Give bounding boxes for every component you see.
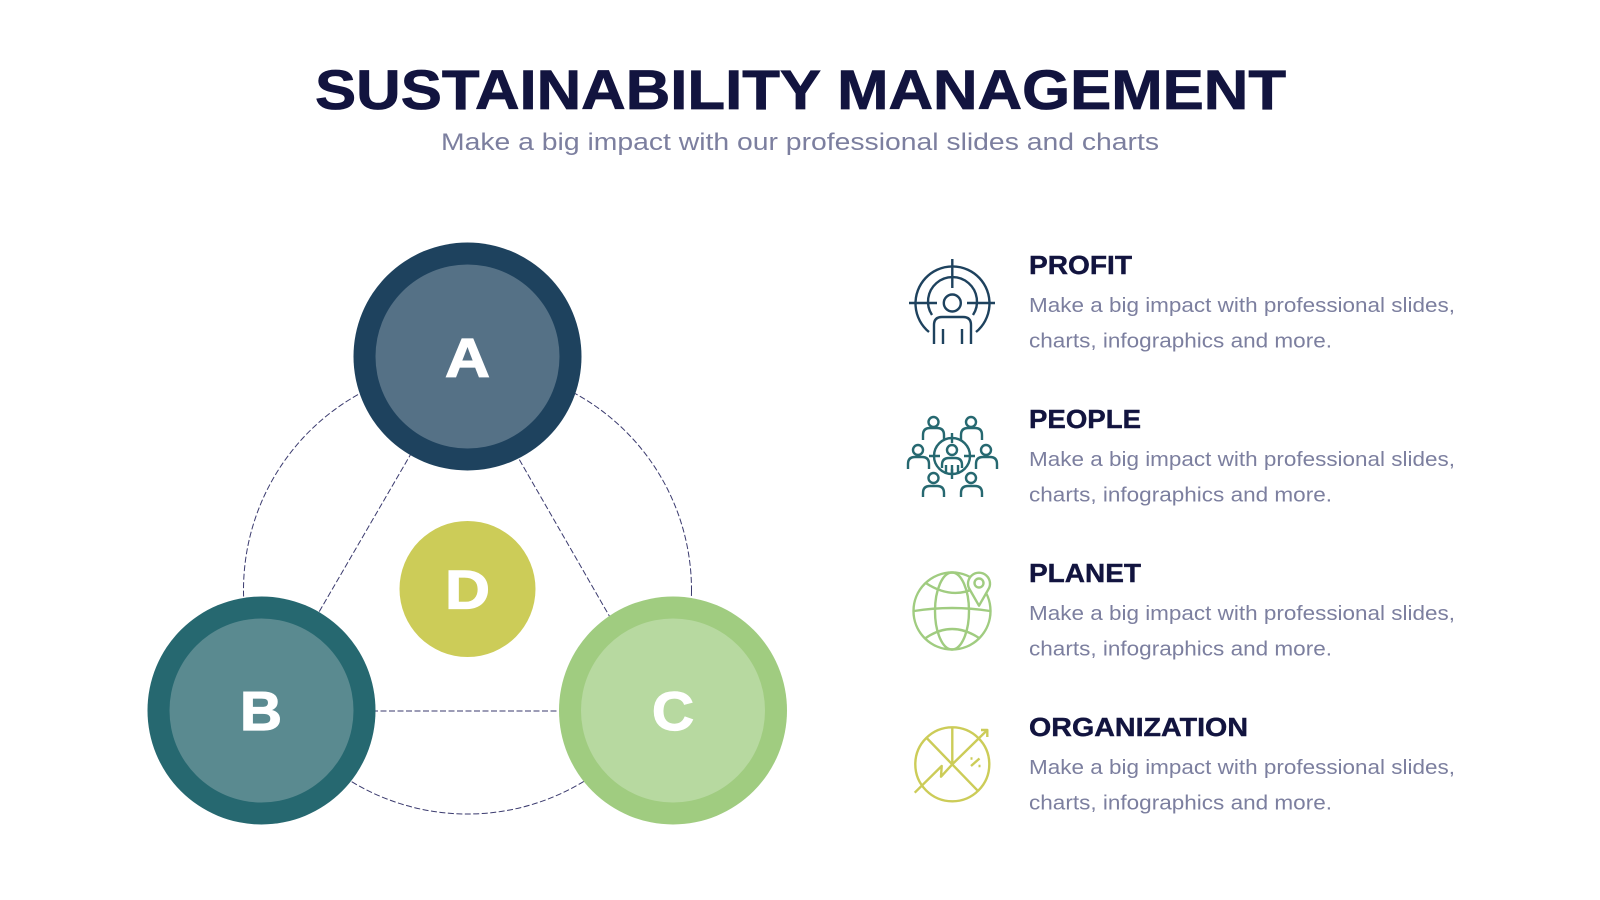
circle C: C [652, 680, 694, 742]
text block: organization [1029, 756, 1455, 814]
panel: profit [909, 252, 1455, 352]
circle A [354, 242, 582, 470]
text block: people: charts, infographics and more. [1029, 484, 1332, 506]
dashed connector ring [244, 366, 692, 814]
diagram: connected circles [148, 242, 787, 824]
heading: planet: PLANET [1029, 560, 1141, 588]
circle D [400, 521, 536, 657]
text block: planet: Make a big impact with professional slides, [1029, 602, 1455, 625]
icon: people target [908, 417, 997, 497]
text block: profit: Make a big impact with professional slides, [1029, 294, 1455, 317]
icon: chart with arrow [915, 727, 989, 801]
text block: planet: charts, infographics and more. [1029, 638, 1332, 660]
circle B [148, 596, 376, 824]
subtitle: Make a big impact with our professional slides and charts [441, 129, 1159, 156]
circle B: B [240, 680, 282, 742]
panel: planet [914, 560, 1455, 660]
icon: target person [909, 259, 995, 344]
text block: planet [1029, 602, 1455, 660]
text block: organization: charts, infographics and more. [1029, 792, 1332, 814]
circle A: A [445, 326, 490, 388]
circle C [559, 596, 787, 824]
text block: profit [1029, 294, 1455, 352]
panel: people [908, 406, 1455, 506]
dashed triangle connectors [262, 356, 673, 711]
text block: people [1029, 448, 1455, 506]
icon: globe with pin [914, 572, 990, 650]
text block: profit: charts, infographics and more. [1029, 330, 1332, 352]
panel: organization [915, 714, 1455, 814]
heading: organization: ORGANIZATION [1029, 714, 1248, 742]
text block: organization: Make a big impact with professional slides, [1029, 756, 1455, 779]
heading: profit: PROFIT [1029, 252, 1132, 280]
heading: people: PEOPLE [1029, 406, 1141, 434]
title: SUSTAINABILITY MANAGEMENT [315, 58, 1286, 121]
circle D: D [445, 558, 490, 620]
text block: people: Make a big impact with professional slides, [1029, 448, 1455, 471]
